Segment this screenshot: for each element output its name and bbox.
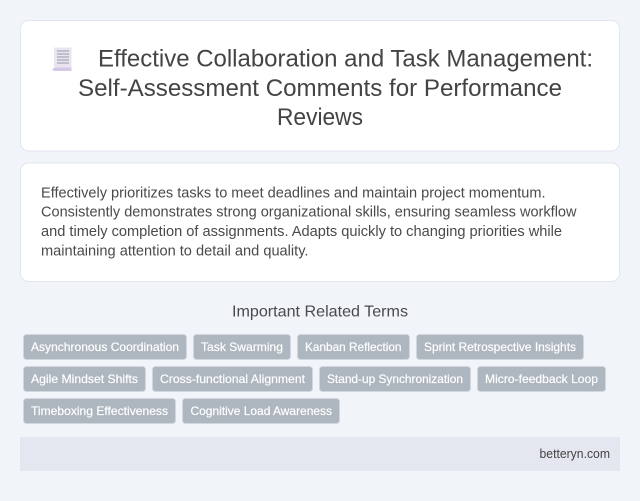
icon: document scroll: [52, 48, 72, 71]
tag: Cross-functional Alignment: [152, 366, 312, 392]
heading: related terms: Important Related Terms: [232, 304, 408, 321]
title: Self-Assessment Comments for Performance: [78, 75, 562, 102]
tag: Agile Mindset Shifts: Agile Mindset Shifts: [31, 372, 138, 386]
tag: Asynchronous Coordination: [24, 334, 186, 360]
tag: Kanban Reflection: [298, 334, 410, 360]
tag: Timeboxing Effectiveness: [24, 398, 176, 424]
tag: Asynchronous Coordination: Asynchronous Coordination: [31, 340, 179, 354]
footer: site name: betteryn.com: [540, 447, 610, 461]
title: Effective Collaboration and Task Management:: [98, 46, 593, 73]
tag: Sprint Retrospective Insights: Sprint Retrospective Insights: [424, 340, 576, 354]
tag: Cross-functional Alignment: Cross-functional Alignment: [160, 372, 306, 386]
tag: Kanban Reflection: Kanban Reflection: [305, 340, 402, 354]
tag: Timeboxing Effectiveness: Timeboxing Effectiveness: [31, 404, 168, 418]
panel: summary card: [20, 163, 620, 282]
tag: Cognitive Load Awareness: [182, 398, 340, 424]
text block: summary: maintaining attention to detail and quality.: [41, 244, 308, 260]
footer bar: [20, 437, 620, 471]
text block: summary: Effectively prioritizes tasks to meet deadlines and maintain project momentum.: [41, 185, 546, 201]
tag: Stand-up Synchronization: Stand-up Synchronization: [327, 372, 463, 386]
title: Reviews: [277, 104, 363, 131]
tag: Stand-up Synchronization: [320, 366, 470, 392]
tag: Micro-feedback Loop: [478, 366, 606, 392]
tag: Agile Mindset Shifts: [24, 366, 146, 392]
tag: Task Swarming: [194, 334, 290, 360]
panel: title card: [20, 20, 620, 151]
tag: Micro-feedback Loop: Micro-feedback Loop: [485, 372, 598, 386]
text block: summary: [41, 185, 577, 260]
tag: Task Swarming: Task Swarming: [201, 340, 283, 354]
title: [78, 46, 593, 131]
tag: Cognitive Load Awareness: Cognitive Load Awareness: [190, 404, 332, 418]
text block: summary: Consistently demonstrates strong organizational skills, ensuring seamless workflow: [41, 205, 577, 221]
text block: summary: and timely completion of assignments. Adapts quickly to changing priorities while: [41, 224, 562, 240]
tag: Sprint Retrospective Insights: [416, 334, 584, 360]
tag group: related terms: [24, 334, 606, 424]
